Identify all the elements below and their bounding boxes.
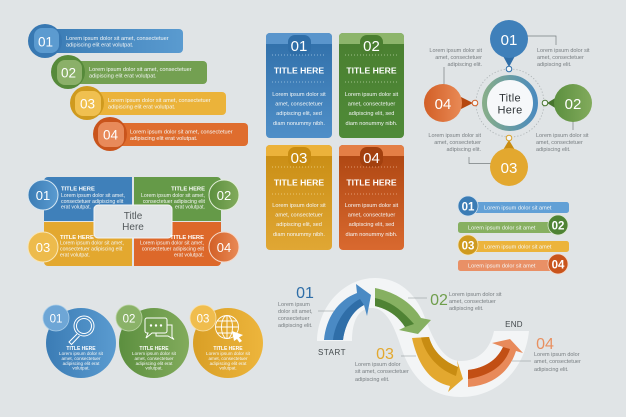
- circle 01 magnifier: volutpat.: [72, 366, 90, 370]
- pill 02: [458, 215, 568, 235]
- card 03: adipiscing elit, sed: [276, 222, 322, 228]
- card 02: Lorem ipsum dolor sit: [345, 92, 399, 98]
- step 03 text: [355, 346, 409, 383]
- pill 02: Lorem ipsum dolor sit amet: [468, 226, 536, 232]
- step 01 text: consectetuer: [278, 316, 310, 322]
- pin 04: Lorem ipsum dolor sit: [429, 48, 482, 54]
- circle 02 chat: 02: [123, 314, 135, 326]
- pin 03: adipiscing elit.: [446, 147, 481, 153]
- card 02: diam nonummy nibh.: [346, 121, 398, 127]
- quadrant 03: [44, 222, 132, 266]
- card 01: 01: [291, 38, 307, 55]
- pin 03: Lorem ipsum dolor sit: [428, 133, 481, 139]
- quadrant text 03: Lorem ipsum dolor sit amet,: [60, 240, 124, 246]
- circle 02 chat: amet, consectetuer: [134, 356, 174, 361]
- quadrant text 02: TITLE HERE: [171, 186, 205, 192]
- pill 02: 02: [552, 220, 564, 232]
- quadrant text 04: consectetuer adipiscing elit: [142, 246, 205, 252]
- badge 04: 04: [217, 240, 231, 255]
- panel: quadrant block: [28, 177, 239, 266]
- center label: Title: [124, 211, 143, 222]
- badge 01: 01: [36, 188, 50, 203]
- quadrant text 02: Lorem ipsum dolor sit amet,: [141, 193, 205, 199]
- pill 01: [458, 196, 569, 216]
- banner 02: 02: [61, 66, 76, 80]
- step 01 text: Lorem ipsum: [278, 302, 310, 308]
- banner 01: 01: [38, 34, 53, 50]
- pin 03: 03: [501, 160, 517, 177]
- step 01 text: adipiscing elit.: [278, 323, 313, 329]
- pill 01: Lorem ipsum dolor sit amet: [484, 206, 552, 212]
- pin 04: adipiscing elit.: [447, 62, 482, 68]
- circle 03 globe: volutpat.: [219, 366, 237, 370]
- badge 03: 03: [36, 240, 50, 255]
- pin 01: [490, 20, 590, 72]
- circle 01 magnifier: 01: [50, 314, 62, 326]
- step 03 text: Lorem ipsum dolor: [355, 362, 401, 368]
- center hub: Here: [497, 104, 523, 116]
- banner 04: [93, 117, 248, 151]
- step 02 text: 02: [430, 292, 448, 309]
- pin 01: Lorem ipsum dolor sit: [537, 48, 590, 54]
- pill 04: 04: [552, 260, 565, 272]
- quadrant text 04: TITLE HERE: [170, 235, 204, 241]
- arrow 03 yellow: [412, 337, 463, 392]
- step 04 text: Lorem ipsum dolor: [534, 352, 580, 358]
- card 03: amet, consectetuer: [275, 212, 323, 218]
- circle 02 chat: Lorem ipsum dolor sit: [132, 351, 177, 356]
- step 02 text: Lorem ipsum dolor sit: [449, 292, 502, 298]
- banner 02: adipiscing elit erat volutpat.: [89, 74, 157, 80]
- badge 02: 02: [217, 188, 231, 203]
- pin 02: adipiscing elit.: [536, 147, 571, 153]
- card 04: diam nonummy nibh.: [346, 232, 398, 238]
- pill 03: 03: [462, 240, 474, 252]
- pin 02: Lorem ipsum dolor sit: [536, 133, 589, 139]
- banner 03: [70, 86, 226, 120]
- pin 03: amet, consectetuer: [434, 140, 481, 146]
- banner 04: adipiscing elit erat volutpat.: [130, 136, 198, 142]
- center hub: Title: [499, 92, 521, 104]
- circle 02 chat: [116, 305, 189, 378]
- step 01 text: [278, 285, 314, 329]
- quadrant text 01: erat volutpat.: [61, 204, 91, 210]
- banner 03: 03: [80, 96, 95, 112]
- card 02: adipiscing elit, sed: [349, 111, 394, 117]
- pill 04: Lorem ipsum dolor sit amet: [468, 264, 536, 270]
- quadrant text 04: erat volutpat.: [174, 252, 204, 258]
- panel: S-curve process: [278, 278, 581, 397]
- arrow 04 orange: [468, 339, 523, 387]
- arrow 02 green: [375, 288, 431, 334]
- banner 02: Lorem ipsum dolor sit amet, consectetuer: [89, 67, 192, 73]
- badge 02: [209, 180, 239, 210]
- step 01 text: dolor sit amet,: [278, 309, 313, 315]
- card 04: [339, 145, 404, 250]
- quadrant text 01: [61, 186, 125, 210]
- circle 03 globe: adipiscing elit erat: [210, 361, 247, 366]
- card 01: amet, consectetuer: [275, 102, 323, 108]
- step 02 text: amet, consectetuer: [449, 299, 496, 305]
- banner 01: Lorem ipsum dolor sit amet, consectetuer: [66, 36, 169, 42]
- pin 02: [536, 84, 592, 153]
- pin 01: 01: [501, 32, 517, 49]
- quadrant text 04: [140, 235, 205, 258]
- card 02: amet, consectetuer: [348, 102, 395, 108]
- card 01: adipiscing elit, sed: [276, 111, 322, 117]
- label START: START: [318, 348, 346, 357]
- panel: stepped banners: [28, 24, 248, 151]
- pin 02: 02: [565, 96, 581, 113]
- step 04 text: adipiscing elit.: [534, 367, 569, 373]
- circle 03 globe: TITLE HERE: [213, 346, 243, 352]
- center label: Here: [122, 222, 144, 233]
- quadrant text 03: consectetuer adipiscing elit: [60, 246, 123, 252]
- card 03: diam nonummy nibh.: [273, 232, 325, 238]
- banner 04: Lorem ipsum dolor sit amet, consectetuer: [130, 130, 233, 136]
- icon: magnifier: [69, 316, 94, 344]
- circle 01 magnifier: adipiscing elit erat: [63, 361, 100, 366]
- step 01 text: 01: [296, 285, 314, 302]
- card 04: Lorem ipsum dolor sit: [345, 203, 399, 209]
- card 04: amet, consectetuer: [348, 212, 395, 218]
- circle 03 globe: 03: [197, 314, 209, 326]
- badge 04: [209, 232, 239, 262]
- panel: pill list: [458, 196, 569, 274]
- card 02: 02: [363, 38, 380, 55]
- banner 02: [51, 55, 207, 89]
- card 02: TITLE HERE: [346, 66, 397, 76]
- quadrant text 01: Lorem ipsum dolor sit amet,: [61, 193, 125, 199]
- pin 02: amet, consectetuer: [536, 140, 583, 146]
- icon: globe and cursor: [216, 316, 243, 342]
- card 03: Lorem ipsum dolor sit: [272, 203, 326, 209]
- step 04 text: [534, 336, 581, 373]
- panel: radial diagram: [424, 20, 592, 186]
- card 04: 04: [363, 150, 380, 167]
- quadrant text 03: [60, 235, 124, 258]
- center hub: [476, 69, 544, 137]
- circle 02 chat: adipiscing elit erat: [136, 361, 173, 366]
- panel: icon circles: [43, 305, 263, 378]
- circle 02 chat: TITLE HERE: [139, 346, 169, 352]
- quadrant text 04: Lorem ipsum dolor sit amet,: [140, 240, 204, 246]
- quadrant text 02: erat volutpat.: [175, 204, 205, 210]
- card 03: TITLE HERE: [274, 178, 324, 188]
- step 03 text: sit amet, consectetuer: [355, 369, 409, 375]
- card 01: diam nonummy nibh.: [273, 121, 325, 127]
- circle 01 magnifier: TITLE HERE: [66, 346, 96, 352]
- pin 04: amet, consectetuer: [435, 55, 482, 61]
- arrow 01 blue: [324, 284, 371, 340]
- quadrant 01: [44, 177, 132, 221]
- quadrant text 02: [141, 186, 206, 210]
- card 04: adipiscing elit, sed: [349, 222, 394, 228]
- pin 03: [428, 133, 528, 186]
- pin 01: adipiscing elit.: [537, 62, 572, 68]
- pin 04: 04: [435, 96, 451, 113]
- center label: [94, 205, 172, 238]
- pill 04: [458, 254, 568, 274]
- panel: title cards: [266, 33, 404, 250]
- card 01: Lorem ipsum dolor sit: [272, 92, 326, 98]
- label END: END: [505, 320, 523, 329]
- card 01: TITLE HERE: [274, 66, 324, 76]
- circle 01 magnifier: Lorem ipsum dolor sit: [59, 351, 104, 356]
- icon: chat bubbles: [145, 318, 174, 340]
- quadrant text 01: consectetuer adipiscing elit: [61, 199, 124, 205]
- step 04 text: amet, consectetuer: [534, 359, 581, 365]
- badge 01: [28, 180, 58, 210]
- banner 04: 04: [103, 128, 118, 142]
- quadrant text 03: erat volutpat.: [60, 252, 90, 258]
- circle 01 magnifier: [43, 305, 116, 378]
- card 01: [266, 33, 332, 138]
- circle 03 globe: [190, 305, 263, 378]
- quadrant text 01: TITLE HERE: [61, 186, 95, 192]
- step 03 text: adipiscing elit.: [355, 377, 390, 383]
- card 03: [266, 145, 332, 250]
- card 03: 03: [291, 150, 307, 167]
- circle 03 globe: amet, consectetuer: [208, 356, 248, 361]
- banner 03: Lorem ipsum dolor sit amet, consectetuer: [108, 98, 211, 104]
- pill 03: [458, 235, 569, 255]
- pin 01: amet, consectetuer: [537, 55, 584, 61]
- step 03 text: 03: [376, 346, 394, 363]
- white S band: [317, 278, 529, 397]
- pill 01: 01: [462, 202, 475, 214]
- circle 01 magnifier: amet, consectetuer: [61, 356, 101, 361]
- step 02 text: adipiscing elit.: [449, 306, 484, 312]
- badge 03: [28, 232, 58, 262]
- circle 02 chat: volutpat.: [145, 366, 163, 370]
- banner 01: [28, 24, 183, 58]
- banner 01: adipiscing elit erat volutpat.: [66, 42, 134, 48]
- card 04: TITLE HERE: [346, 178, 397, 188]
- quadrant 04: [134, 222, 221, 266]
- card 02: [339, 33, 404, 138]
- pill 03: Lorem ipsum dolor sit amet: [484, 244, 552, 250]
- quadrant text 03: TITLE HERE: [60, 235, 94, 241]
- banner 03: adipiscing elit erat volutpat.: [108, 104, 176, 110]
- pin 04: [424, 48, 482, 122]
- step 04 text: 04: [536, 336, 554, 353]
- quadrant 02: [134, 177, 221, 221]
- step 02 text: [430, 292, 502, 312]
- leader lines: [318, 298, 531, 361]
- circle 03 globe: Lorem ipsum dolor sit: [206, 351, 251, 356]
- quadrant text 02: consectetuer adipiscing elit: [143, 199, 206, 205]
